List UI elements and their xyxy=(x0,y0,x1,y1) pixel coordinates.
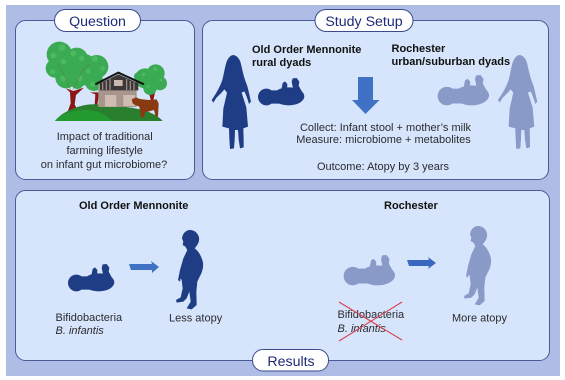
panel: results xyxy=(16,190,550,371)
heading: results xyxy=(252,350,328,371)
icon: child light xyxy=(464,226,491,305)
label: Rochester dyads: urban/suburban dyads xyxy=(392,56,510,68)
arrow: right dark group xyxy=(129,261,159,273)
label: Old Order Mennonite dyads xyxy=(252,44,361,69)
left tree xyxy=(46,42,108,112)
heading: Old Order Mennonite: Old Order Mennonite xyxy=(79,200,188,212)
text: question xyxy=(41,131,167,171)
label: Rochester dyads: Rochester xyxy=(392,43,446,55)
icon: child dark xyxy=(176,230,203,309)
right tree xyxy=(134,64,167,100)
text: more atopy: More atopy xyxy=(452,312,508,324)
label: Old Order Mennonite dyads: rural dyads xyxy=(252,57,311,69)
icon: baby light xyxy=(344,255,395,285)
cross xyxy=(339,302,402,341)
panel: study setup xyxy=(202,10,548,180)
label: Old Order Mennonite dyads: Old Order Mennonite xyxy=(252,44,361,56)
heading: question xyxy=(54,10,140,32)
heading: results: Results xyxy=(267,354,315,370)
text: question: on infant gut microbiome? xyxy=(41,159,167,171)
heading: study setup xyxy=(315,10,413,32)
hill xyxy=(55,104,163,121)
icon: baby dark xyxy=(68,264,114,291)
text: bifidobacteria xyxy=(56,312,123,337)
heading: question: Question xyxy=(69,14,126,30)
heading: Rochester: Rochester xyxy=(384,200,439,212)
text: less atopy: Less atopy xyxy=(169,312,223,324)
text: question: farming lifestyle xyxy=(66,145,143,157)
barn xyxy=(95,73,144,107)
text: collect and measure: Measure: microbiome + metabolites xyxy=(296,134,471,146)
icon: mother light xyxy=(498,55,537,149)
label: Rochester dyads xyxy=(392,43,510,68)
cow xyxy=(132,97,159,117)
arrow: down xyxy=(352,77,380,114)
text: crossed out bifidobacteria: B. infantis xyxy=(338,323,386,335)
text: collect and measure: Collect: Infant stool + mother’s milk xyxy=(300,122,472,134)
text: crossed out bifidobacteria: Bifidobacteria xyxy=(338,309,405,321)
icon: mother dark xyxy=(212,55,251,149)
illustration: farm with trees, barn and cow xyxy=(46,42,167,121)
text: question: Impact of traditional xyxy=(57,131,153,143)
text: crossed out bifidobacteria xyxy=(338,302,405,341)
icon: baby light xyxy=(438,75,489,105)
text: collect and measure xyxy=(296,122,472,146)
text: outcome: Outcome: Atopy by 3 years xyxy=(317,161,450,173)
icon: baby dark xyxy=(258,78,304,105)
heading: study setup: Study Setup xyxy=(325,14,403,30)
arrow: right light group xyxy=(407,257,436,269)
panel: question xyxy=(16,10,194,180)
text: bifidobacteria: Bifidobacteria xyxy=(56,312,123,324)
text: bifidobacteria: B. infantis xyxy=(56,325,104,337)
